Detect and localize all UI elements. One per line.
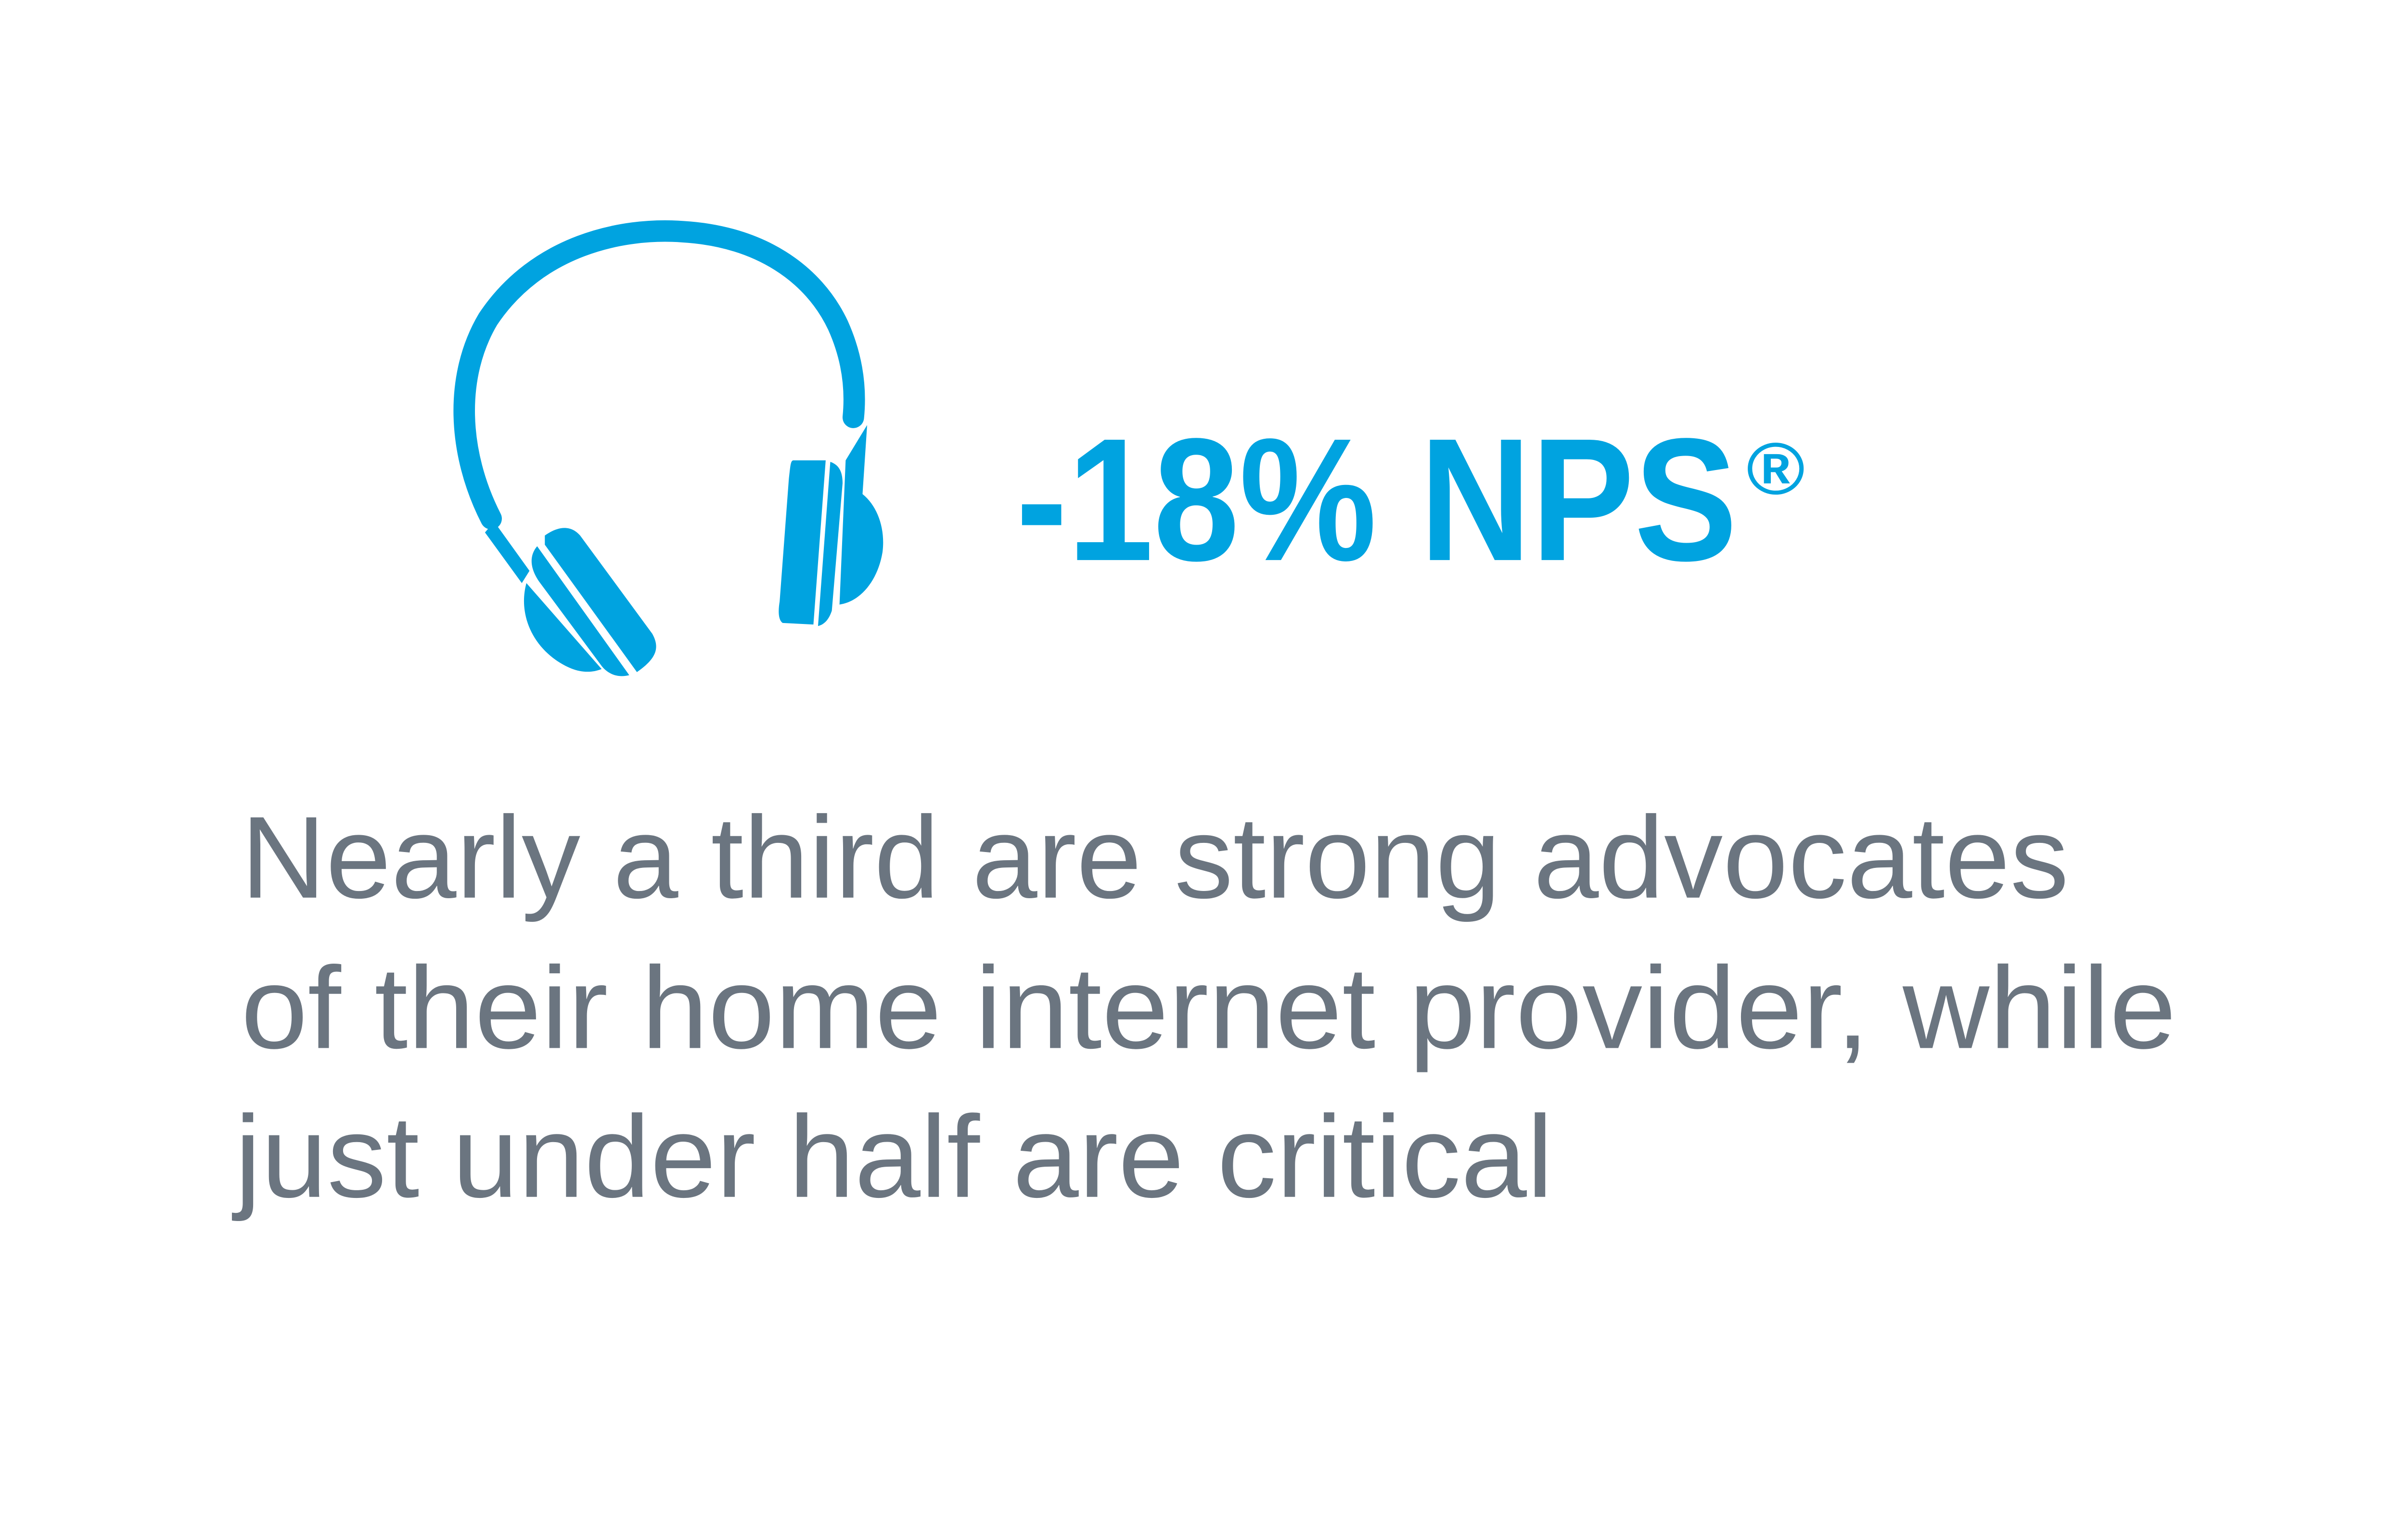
body text: just under half are critical	[232, 1092, 1553, 1222]
left ear cup	[485, 522, 656, 676]
body text: Nearly a third are strong advocates	[241, 793, 2069, 923]
registered mark: ®	[1747, 428, 1805, 510]
headline: -18% NPS: -18% NPS	[1016, 402, 1737, 598]
body text	[232, 793, 2176, 1222]
body text: of their home internet provider, while	[241, 943, 2176, 1073]
icon: headphones	[464, 231, 883, 676]
right ear cup	[779, 425, 883, 626]
headband	[464, 231, 854, 519]
